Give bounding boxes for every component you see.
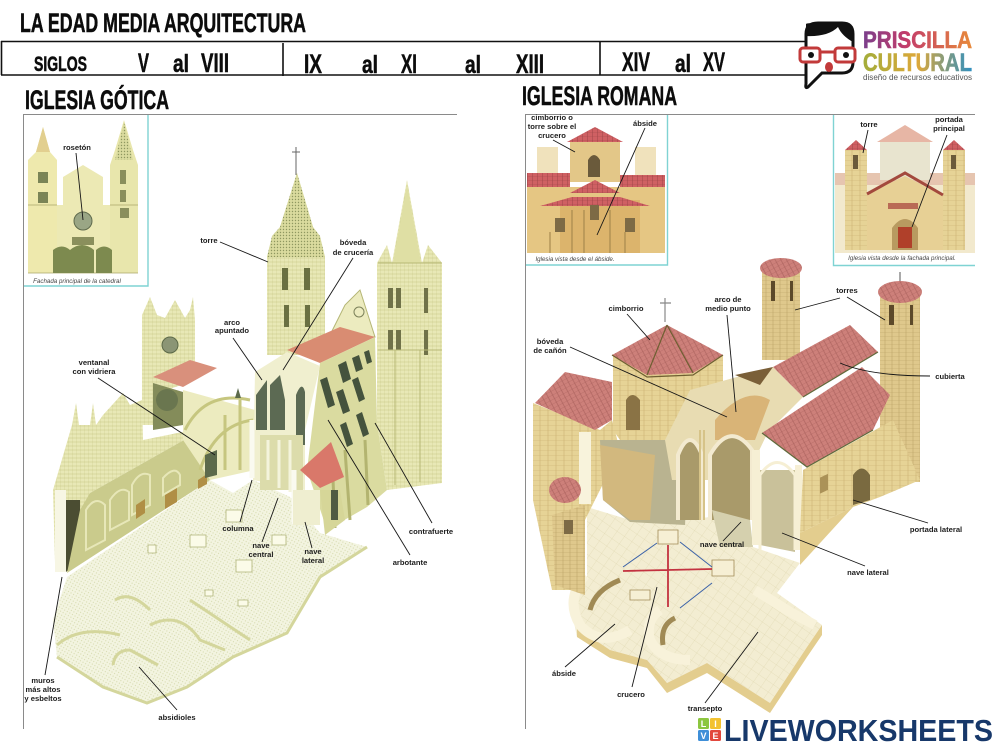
label: ábside: ábside bbox=[633, 119, 657, 128]
label: crucero bbox=[617, 587, 657, 699]
label: nave central: nave central bbox=[700, 540, 744, 549]
label: ábside: ábside bbox=[552, 669, 576, 678]
label: ventanal con vidriera: con vidriera bbox=[72, 367, 116, 376]
label: cimborrio o torre sobre el crucero: cimborrio o bbox=[531, 113, 573, 122]
inset: iglesia vista desde la fachada principal bbox=[834, 115, 975, 266]
label: cimborrio bbox=[608, 304, 650, 340]
caption: fachada principal: Iglesia vista desde la fachada principal. bbox=[848, 255, 956, 262]
right wall bbox=[800, 420, 920, 533]
label: torres bbox=[795, 286, 885, 320]
nave roof bbox=[287, 327, 375, 363]
timeline table: siglos: al bbox=[675, 50, 691, 78]
apse wall rings bbox=[574, 575, 815, 660]
label: contrafuerte: contrafuerte bbox=[409, 527, 453, 536]
label: transepto bbox=[688, 632, 758, 713]
label: torre bbox=[860, 120, 878, 153]
label: bóveda de crucería bbox=[283, 238, 374, 370]
label: bóveda de cañón: bóveda bbox=[537, 337, 564, 346]
central arcade pier bbox=[752, 450, 802, 550]
timeline table: siglos: XI bbox=[401, 49, 417, 79]
label: torres: torres bbox=[836, 286, 858, 295]
tower one bbox=[762, 270, 800, 360]
timeline table: siglos: VIII bbox=[201, 48, 229, 78]
foundation wall edge bbox=[577, 625, 822, 713]
heading: iglesia romana: IGLESIA ROMANA bbox=[522, 81, 677, 111]
caption: ábside: Iglesia vista desde el ábside. bbox=[535, 256, 615, 263]
label: crucero: crucero bbox=[617, 690, 645, 699]
timeline table: siglos: XIII bbox=[516, 49, 544, 79]
label: muros más altos y esbeltos: muros bbox=[31, 676, 55, 685]
label: cubierta bbox=[840, 363, 966, 381]
label: bóveda de cañón: de cañón bbox=[533, 346, 567, 355]
timeline table: siglos: XV bbox=[703, 47, 725, 77]
label: nave central bbox=[700, 522, 744, 549]
logo: Priscilla Cultural: PRISCILLA bbox=[863, 27, 972, 54]
plan diagram: cross in red, blue ties bbox=[623, 542, 712, 608]
left transept body bbox=[533, 403, 620, 590]
label: nave lateral bbox=[782, 533, 889, 577]
label: rosetón bbox=[63, 143, 91, 220]
label: muros más altos y esbeltos bbox=[24, 577, 62, 703]
label: cimborrio o torre sobre el crucero: crucero bbox=[538, 131, 566, 140]
label: torre: torre bbox=[200, 236, 218, 245]
label: nave central: nave bbox=[252, 541, 270, 550]
label: portada lateral bbox=[853, 500, 962, 534]
buttressed right side bbox=[307, 337, 387, 530]
floor outlines: absidioles bbox=[57, 547, 367, 703]
timeline table: siglos: IX bbox=[304, 49, 322, 79]
label: arco apuntado: apuntado bbox=[215, 326, 249, 335]
liveworksheets logo: I bbox=[714, 719, 717, 729]
label: contrafuerte bbox=[375, 423, 453, 536]
caption: fachada: Fachada principal de la catedral bbox=[33, 278, 121, 285]
label: cubierta: cubierta bbox=[935, 372, 966, 381]
flying buttresses bbox=[183, 390, 255, 480]
inset: iglesia vista desde el ábside bbox=[526, 113, 668, 265]
long wall with arches bbox=[67, 427, 210, 573]
left tower and transept front bbox=[142, 297, 195, 425]
label: bóveda de cañón bbox=[533, 337, 727, 417]
timeline table: siglos: al bbox=[173, 50, 189, 78]
label: portada lateral: portada lateral bbox=[910, 525, 962, 534]
label: bóveda de crucería: de crucería bbox=[333, 248, 374, 257]
label: muros más altos y esbeltos: más altos bbox=[25, 685, 61, 694]
label: ábside bbox=[552, 624, 615, 678]
heading: iglesia gótica: IGLESIA GÓTICA bbox=[25, 84, 169, 115]
timeline table: siglos bbox=[1, 41, 810, 79]
vault and central nave bbox=[253, 352, 320, 490]
label: arbotante: arbotante bbox=[393, 558, 427, 567]
label: arco apuntado: arco bbox=[224, 318, 240, 327]
liveworksheets logo: L bbox=[701, 719, 707, 729]
open truss bbox=[735, 367, 773, 385]
logo: Priscilla Cultural bbox=[800, 23, 972, 88]
floor bbox=[53, 480, 367, 703]
label: ventanal con vidriera: ventanal bbox=[79, 358, 109, 367]
label: cimborrio o torre sobre el crucero bbox=[528, 113, 576, 152]
label: nave lateral bbox=[302, 522, 324, 565]
lower nave wall bbox=[600, 440, 690, 525]
small apse tower bbox=[552, 505, 585, 595]
timeline table: siglos: XIV bbox=[622, 47, 650, 77]
label: rosetón: rosetón bbox=[63, 143, 91, 152]
label: arco de medio punto: medio punto bbox=[705, 304, 751, 313]
left front mass and spires bbox=[53, 393, 207, 570]
label: columna: columna bbox=[222, 524, 254, 533]
logo: Priscilla Cultural: CULTURAL bbox=[863, 49, 972, 77]
panel: iglesia gótica illustration bbox=[24, 114, 457, 729]
timeline table: siglos: SIGLOS bbox=[34, 53, 87, 76]
lateral chapel roof and door bbox=[300, 442, 344, 488]
label: nave central bbox=[249, 498, 278, 559]
label: portada principal bbox=[912, 115, 965, 227]
right tower bbox=[377, 180, 442, 490]
tower two bbox=[880, 297, 920, 482]
inset: fachada principal de la catedral bbox=[24, 115, 148, 286]
timeline table: siglos: al bbox=[362, 51, 378, 79]
floor plan bbox=[570, 507, 822, 703]
label: ventanal con vidriera bbox=[72, 358, 215, 455]
logo: Priscilla Cultural: diseño de recursos educativos bbox=[863, 73, 972, 82]
label: cimborrio: cimborrio bbox=[608, 304, 644, 313]
label: arco de medio punto bbox=[705, 295, 751, 412]
label: torre bbox=[200, 236, 268, 262]
label: nave lateral: lateral bbox=[302, 556, 324, 565]
barrel vault and nave arches bbox=[665, 367, 803, 480]
label: transepto: transepto bbox=[688, 704, 723, 713]
liveworksheets logo: V bbox=[700, 731, 707, 741]
liveworksheets logo: E bbox=[712, 731, 719, 741]
label: ábside bbox=[597, 119, 657, 235]
timeline table: siglos: al bbox=[465, 51, 481, 79]
gable behind roof bbox=[330, 290, 375, 337]
lower main roof bbox=[762, 367, 890, 467]
crossing tower bbox=[613, 355, 723, 440]
label: torre: torre bbox=[860, 120, 878, 129]
label: columna bbox=[222, 480, 254, 533]
label: arco de medio punto: arco de bbox=[714, 295, 742, 304]
label: nave central: central bbox=[249, 550, 273, 559]
central tower bbox=[267, 173, 325, 355]
label: arbotante bbox=[328, 420, 427, 567]
label: portada principal: principal bbox=[933, 124, 965, 133]
upper main roof bbox=[773, 325, 878, 397]
title: LA EDAD MEDIA ARQUITECTURA bbox=[20, 8, 306, 38]
timeline table: siglos: V bbox=[138, 48, 149, 78]
pier bases bbox=[148, 510, 286, 606]
panel: iglesia romana illustration bbox=[525, 113, 975, 729]
label: nave lateral: nave lateral bbox=[847, 568, 889, 577]
label: absidioles bbox=[139, 667, 196, 722]
label: cimborrio o torre sobre el crucero: torre sobre el bbox=[528, 122, 576, 131]
label: portada principal: portada bbox=[935, 115, 964, 124]
label: muros más altos y esbeltos: y esbeltos bbox=[24, 694, 62, 703]
left roof bbox=[535, 372, 612, 430]
label: arco apuntado bbox=[215, 318, 262, 380]
label: bóveda de crucería: bóveda bbox=[340, 238, 367, 247]
label: absidioles: absidioles bbox=[158, 713, 196, 722]
label: nave lateral: nave bbox=[304, 547, 322, 556]
